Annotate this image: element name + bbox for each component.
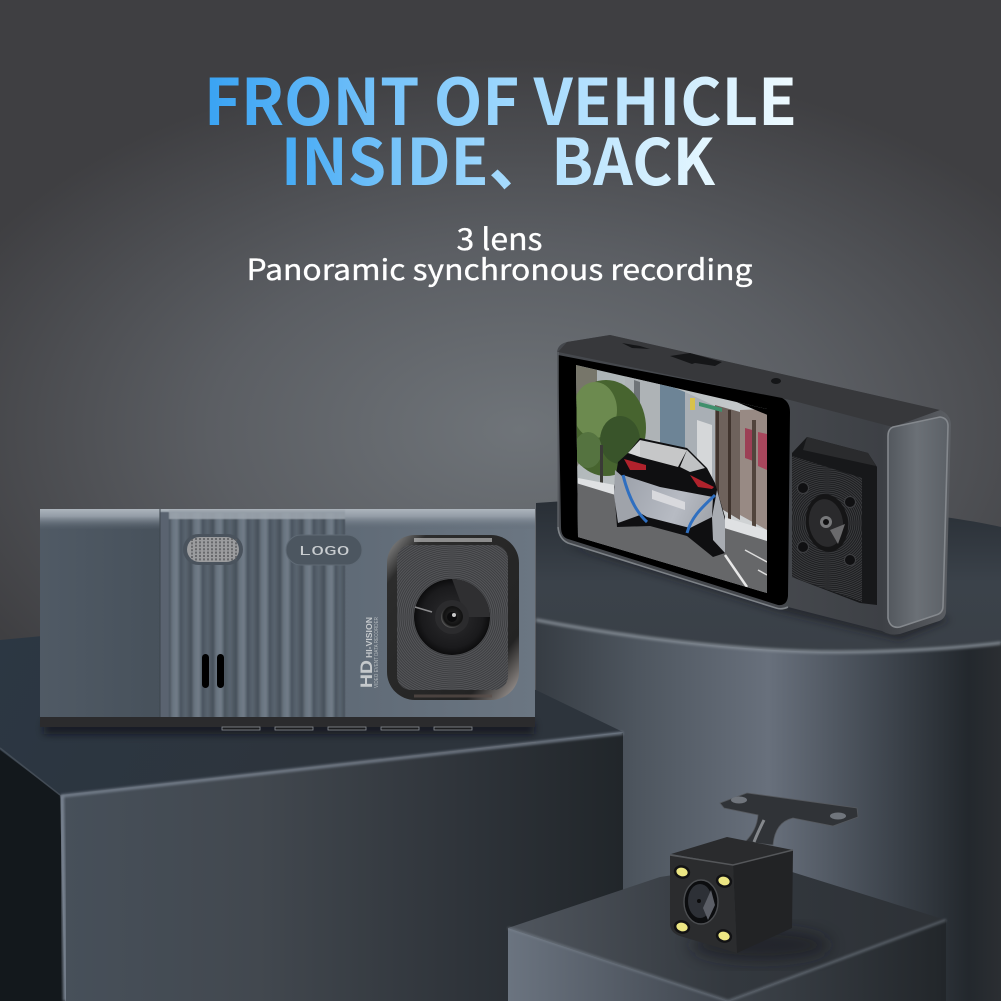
car — [614, 438, 725, 557]
rear lens module — [792, 437, 877, 605]
title — [204, 52, 797, 204]
vertical ribs — [160, 510, 345, 718]
HD HI-VISION label — [357, 617, 380, 688]
screen image — [576, 365, 767, 593]
bottom dark edge — [40, 717, 535, 727]
HD HI-VISION label: HD — [357, 660, 376, 688]
rear backup camera — [670, 793, 858, 953]
mounting bracket — [720, 793, 858, 845]
square pedestal (left) — [0, 625, 623, 1001]
title: BACK — [551, 112, 716, 204]
white LEDs — [674, 865, 732, 943]
lens — [684, 880, 718, 924]
dash cam: rear screen view — [557, 335, 951, 640]
camera body — [40, 509, 535, 727]
HD HI-VISION label: HI-VISION — [364, 617, 374, 658]
top ports — [622, 343, 781, 384]
title: FRONT OF VEHICLE — [204, 52, 797, 144]
microphone slots — [202, 654, 224, 688]
logo badge — [286, 535, 362, 565]
buildings — [576, 365, 770, 530]
title: INSIDE、 — [281, 112, 550, 204]
road — [576, 483, 767, 600]
bezel edge highlight — [558, 527, 788, 609]
housing top — [671, 837, 793, 865]
tree — [576, 380, 646, 483]
sidewalk — [578, 478, 767, 545]
speaker grille — [183, 534, 243, 565]
top highlight — [40, 509, 535, 529]
round pedestal (back right) — [536, 499, 1001, 1001]
shadow under rear camera — [690, 929, 830, 961]
infrared LEDs — [798, 482, 856, 566]
subtitle: 3 lens — [456, 215, 542, 259]
logo badge: LOGO — [298, 544, 350, 560]
soft ground shadow — [565, 545, 950, 640]
top face — [558, 335, 940, 427]
housing — [557, 335, 951, 635]
small square pedestal (front right) — [508, 862, 946, 1001]
contact shadow under left dash cam — [44, 722, 534, 734]
housing side — [733, 850, 793, 953]
screen bezel — [558, 355, 790, 605]
end cap — [888, 417, 948, 627]
bottom buttons — [222, 727, 472, 730]
sky and city — [570, 360, 770, 600]
front lens module — [387, 535, 519, 700]
subtitle — [246, 215, 752, 289]
subtitle: Panoramic synchronous recording — [246, 247, 752, 289]
housing front — [670, 855, 737, 953]
HD HI-VISION label: VIDEO EVENT DATA RECORDER — [374, 617, 380, 688]
street sign — [699, 402, 722, 412]
dash cam: front view — [40, 509, 535, 730]
